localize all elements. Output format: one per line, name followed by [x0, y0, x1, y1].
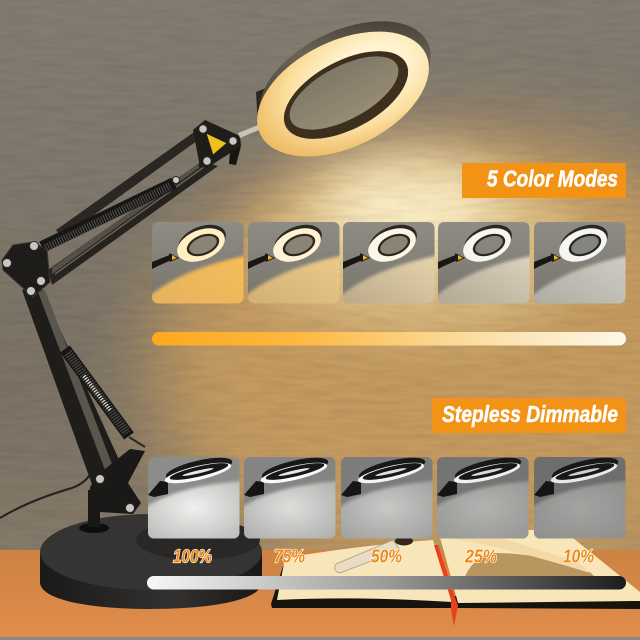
upper arm top bar [56, 130, 201, 238]
post flange [79, 523, 109, 533]
yellow warning label [206, 133, 227, 155]
base side [40, 552, 262, 609]
right page [438, 530, 640, 603]
upper arm lower bar [48, 161, 218, 285]
power cable [0, 470, 92, 518]
spring hook [129, 437, 145, 447]
brightness percentage labels: 100% [173, 546, 212, 566]
thumbnail: warm [152, 222, 244, 304]
panel: color mode thumbnails [152, 222, 626, 304]
ring mount nub [256, 88, 272, 126]
thumbnail: 50% [341, 457, 432, 538]
thumbnail: 25% [437, 457, 528, 538]
arm rivets [2, 125, 237, 513]
thumbnail: neutral [343, 222, 434, 304]
thumbnail: 10% [534, 457, 626, 538]
ring opening [279, 41, 409, 145]
brightness percentage labels: 75% [274, 546, 305, 566]
upper arm wall gap [52, 162, 199, 274]
plate clip [229, 146, 241, 165]
lower bracket [89, 449, 145, 518]
brightness percentage labels: 50% [371, 546, 402, 566]
thumbnail: daylight [534, 222, 626, 304]
open book [271, 530, 640, 626]
thumbnail: 75% [244, 457, 336, 538]
brightness bar [147, 576, 626, 590]
post [88, 490, 100, 527]
left page [277, 540, 452, 602]
base top [40, 514, 262, 590]
book mark ribbon [434, 545, 458, 626]
desk surface [0, 550, 640, 640]
left pivot plate [2, 242, 50, 297]
lamp arm [2, 120, 259, 518]
ring lamp head [237, 0, 450, 182]
heading: 5 Color Modes [462, 163, 626, 198]
brightness percentage labels [173, 546, 594, 566]
pen [335, 540, 400, 573]
base recess [136, 520, 260, 560]
top triangle plate [193, 120, 241, 168]
lamp base and power cable [0, 470, 262, 609]
thumbnail: cool white [438, 222, 530, 304]
ring body [240, 0, 450, 170]
brightness percentage labels: 25% [464, 546, 497, 566]
brightness percentage labels: 10% [563, 546, 594, 566]
thumbnail: warm white [248, 222, 340, 304]
color temperature bar [152, 332, 626, 346]
heading: Stepless Dimmable [432, 398, 626, 433]
upper arm spring [42, 183, 174, 247]
ring inner rim [270, 33, 422, 157]
ring light [237, 6, 449, 182]
pen holder shadow [395, 536, 413, 546]
book cover [271, 566, 640, 609]
lower arm spring [65, 349, 129, 436]
lower arm bars [22, 285, 120, 490]
thumbnail: 100% [148, 457, 240, 538]
neck joint [238, 125, 259, 138]
panel: brightness thumbnails [148, 457, 626, 538]
page curl block [460, 553, 598, 590]
page curl top sheet [440, 530, 590, 573]
